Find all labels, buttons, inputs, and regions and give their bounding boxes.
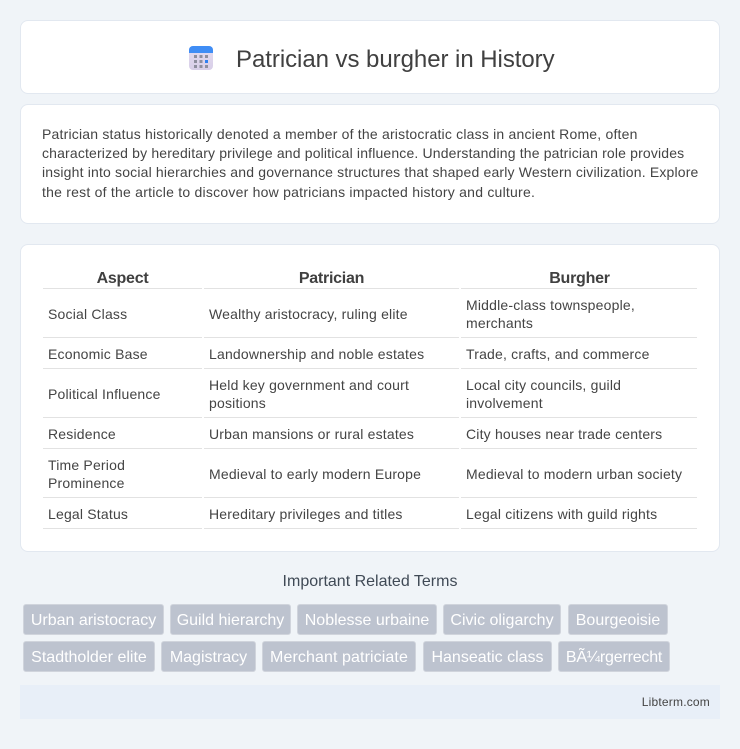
tag: BÃ¼rgerrecht [566,649,662,666]
tag: Urban aristocracy [31,612,156,629]
row: Social Class: Middle-class townspeople, [466,297,635,313]
tag: Noblesse urbaine [305,612,429,629]
row: Economic Base: Trade, crafts, and commerce [466,346,650,362]
row: Social Class [48,297,635,331]
tag: Stadtholder elite [31,649,147,666]
row: Time Period Prominence: Medieval to early modern Europe [209,466,421,482]
row: Political Influence [48,377,621,411]
tag [161,641,256,672]
intro paragraph: the rest of the article to discover how patricians impacted history and culture. [42,184,535,200]
row: Social Class: Wealthy aristocracy, ruling elite [209,306,408,322]
tag [23,641,155,672]
row: Time Period Prominence: Prominence [48,475,125,491]
row: Economic Base: Landownership and noble estates [209,346,424,362]
row: Legal Status: Legal citizens with guild rights [466,506,657,522]
footer bar [20,685,720,719]
panel: intro text [20,104,720,224]
row: Political Influence: Political Influence [48,386,161,402]
tag [558,641,670,672]
tag [443,604,561,635]
tag: Hanseatic class [431,649,544,666]
intro paragraph: Patrician status historically denoted a member of the aristocratic class in ancient Rome, often [42,126,638,142]
icon: calendar [189,46,213,70]
tag: Bourgeoisie [576,612,660,629]
tag group: related terms [23,604,670,672]
panel: comparison table [20,244,720,552]
table header: Patrician [299,270,364,287]
tag: Civic oligarchy [450,612,554,629]
tag [170,604,291,635]
row: Residence: Urban mansions or rural estates [209,426,414,442]
row: Social Class: Social Class [48,306,127,322]
tag [23,604,164,635]
row: Legal Status [48,506,657,522]
row: Residence [48,426,662,442]
row: Economic Base: Economic Base [48,346,148,362]
tag: Guild hierarchy [177,612,284,629]
title: Patrician vs burgher in History [236,46,555,73]
row: Time Period Prominence: Time Period [48,457,125,473]
footer credit: Libterm.com [642,695,710,709]
row: Political Influence: positions [209,395,266,411]
table header: Burgher [549,270,610,287]
header card [20,20,720,94]
tag [297,604,437,635]
row: Residence: City houses near trade centers [466,426,662,442]
intro paragraph: insight into social hierarchies and governance structures that shaped early Western civilization. Explore [42,164,698,180]
table header [97,270,610,287]
heading: related terms: Important Related Terms [283,573,457,590]
tag: Magistracy [170,649,247,666]
row: Time Period Prominence: Medieval to modern urban society [466,466,682,482]
row: Residence: Residence [48,426,116,442]
row: Social Class: merchants [466,315,533,331]
tag [423,641,552,672]
table header: Aspect [97,270,148,287]
tag [262,641,416,672]
row: Legal Status: Hereditary privileges and titles [209,506,403,522]
tag: Merchant patriciate [270,649,408,666]
row: Political Influence: Local city councils, guild [466,377,621,393]
tag [568,604,668,635]
intro paragraph: characterized by hereditary privilege and political influence. Understanding the patrician role provides [42,145,684,161]
row: Political Influence: Held key government and court [209,377,409,393]
row: Time Period Prominence [48,457,682,491]
row: Economic Base [48,346,650,362]
intro paragraph [42,126,698,200]
row: Legal Status: Legal Status [48,506,128,522]
row: Political Influence: involvement [466,395,543,411]
